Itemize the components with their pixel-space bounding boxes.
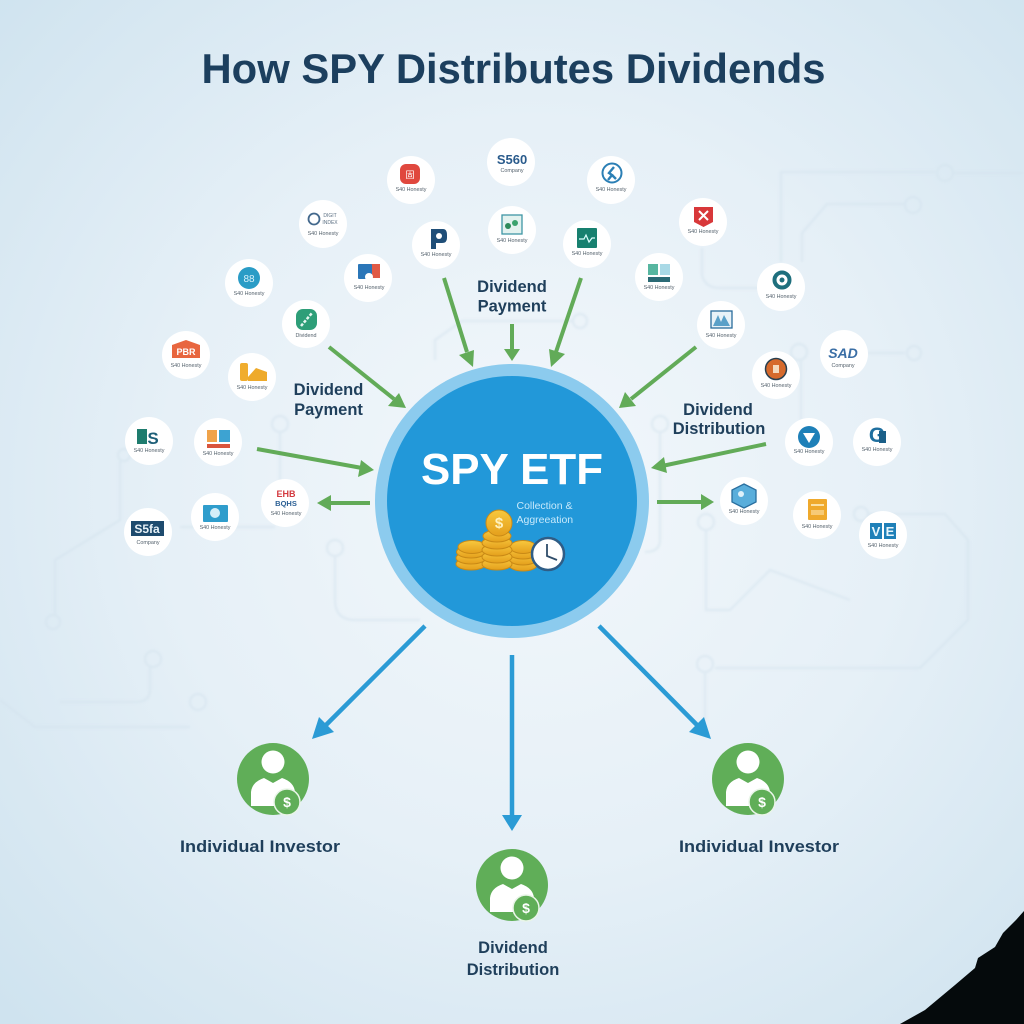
investor icon: left: $ [283,794,291,810]
investor icon: right [712,743,784,815]
company node 4: DIGIT [323,213,337,219]
circuit pattern [0,165,1024,727]
icon: gold coin stacks [456,510,537,571]
company node 25: EHB [276,489,296,499]
company node 15: S40 Honesty [171,363,202,369]
arrow: payment 5 [619,347,696,408]
company node 24 [124,508,172,556]
company node 27: S40 Honesty [802,524,833,530]
company node 15 [162,331,210,379]
company node 4: INDEX [322,220,338,226]
company node 1: 固 [405,170,415,180]
company node 25: BQHS [275,499,297,508]
company node 1: S40 Honesty [396,187,427,193]
central SPY ETF circle [375,364,649,638]
company node 28: E [886,524,895,539]
company node 4 [299,200,347,248]
arrow: payment 4 [329,347,406,408]
investor icon: left [237,743,309,815]
arrow: payment 7 [651,444,766,473]
company node 25: S40 Honesty [271,511,302,517]
label: individual investor right: Individual Investor [679,838,840,856]
green arrows into and out of the ETF [257,278,766,511]
company node 25 [261,479,309,527]
icon: clock [532,538,564,570]
label: dividend distribution bottom: Dividend [478,939,548,957]
arrow: distribution right [657,494,714,510]
company node 21 [785,418,833,466]
label: dividend payment left: Payment [294,401,363,419]
company node 22: S40 Honesty [862,447,893,453]
company node 11: S40 Honesty [644,285,675,291]
company node 2: S560 [497,152,527,167]
company node 9 [225,259,273,307]
company node 7 [563,220,611,268]
company node 4: S40 Honesty [308,231,339,237]
company node 2 [487,138,535,186]
company node 24: Company [136,540,160,546]
company node 28 [859,511,907,559]
company node 22 [853,418,901,466]
blue arrows to investors [312,626,711,831]
label: dividend payment top: Payment [478,298,547,316]
company node 19: S40 Honesty [134,448,165,454]
company node 8 [679,198,727,246]
arrow: to right investor [599,626,711,739]
company node 12: S40 Honesty [766,294,797,300]
company node 15: PBR [176,347,196,357]
investor icon: right: $ [758,794,766,810]
company node 5 [412,221,460,269]
company node 14 [697,301,745,349]
label: dividend distribution right: Dividend [683,401,753,419]
company node 18 [820,330,868,378]
company node 16 [228,353,276,401]
investor icon: center [476,849,548,921]
company node 17: S40 Honesty [761,383,792,389]
arrow: payment 1 [444,278,474,367]
company node 12 [757,263,805,311]
icon: dollar on coin: $ [495,515,504,532]
company node 22: G [869,424,885,447]
company node 21: S40 Honesty [794,449,825,455]
company node 18: SAD [828,345,858,361]
arrow: payment 6 [257,449,374,477]
company node 20: S40 Honesty [203,451,234,457]
company node 8: S40 Honesty [688,229,719,235]
arrow: distribution left [317,495,370,511]
company node 19 [125,417,173,465]
black corner [900,911,1024,1024]
company node 26 [720,477,768,525]
company node 13 [282,300,330,348]
company node 26: S40 Honesty [729,509,760,515]
company node 1 [387,156,435,204]
label: dividend distribution right: Distribution [673,420,765,438]
company node 17 [752,351,800,399]
investor icon: center: $ [522,900,530,916]
heading: SPY ETF: SPY ETF [421,445,603,494]
company node 19: S [147,429,159,448]
company node 11 [635,253,683,301]
company node 9: S40 Honesty [234,291,265,297]
arrow: payment 3 [549,278,581,367]
company node 6 [488,206,536,254]
company node 24: S5fa [134,522,160,536]
label: dividend distribution bottom: Distribution [467,961,559,979]
company node 10 [344,254,392,302]
company node 3: S40 Honesty [596,187,627,193]
company node 20 [194,418,242,466]
company node 27 [793,491,841,539]
company node 14: S40 Honesty [706,333,737,339]
company node 23: S40 Honesty [200,525,231,531]
label: individual investor left: Individual Investor [180,838,341,856]
company node 6: S40 Honesty [497,238,528,244]
company node 3 [587,156,635,204]
label: dividend payment left: Dividend [294,381,363,399]
label: dividend payment top: Dividend [477,278,547,296]
arrow: payment 2 [504,324,520,361]
caption: collection and aggregation: Collection & [516,500,573,512]
company node 18: Company [831,363,855,369]
company node 28: V [872,524,881,539]
company node 28: S40 Honesty [868,543,899,549]
arrow: to center investor [502,655,522,831]
company node 5: S40 Honesty [421,252,452,258]
company node 23 [191,493,239,541]
arrow: to left investor [312,626,425,739]
company node 10: S40 Honesty [354,285,385,291]
title: How SPY Distributes Dividends [202,45,826,92]
company node 13: Dividend [296,333,316,339]
caption: collection and aggregation: Aggreeation [516,514,573,526]
company node 9: 88 [243,274,255,285]
company node 2: Company [500,168,524,174]
company node 7: S40 Honesty [572,251,603,257]
company node 16: S40 Honesty [237,385,268,391]
